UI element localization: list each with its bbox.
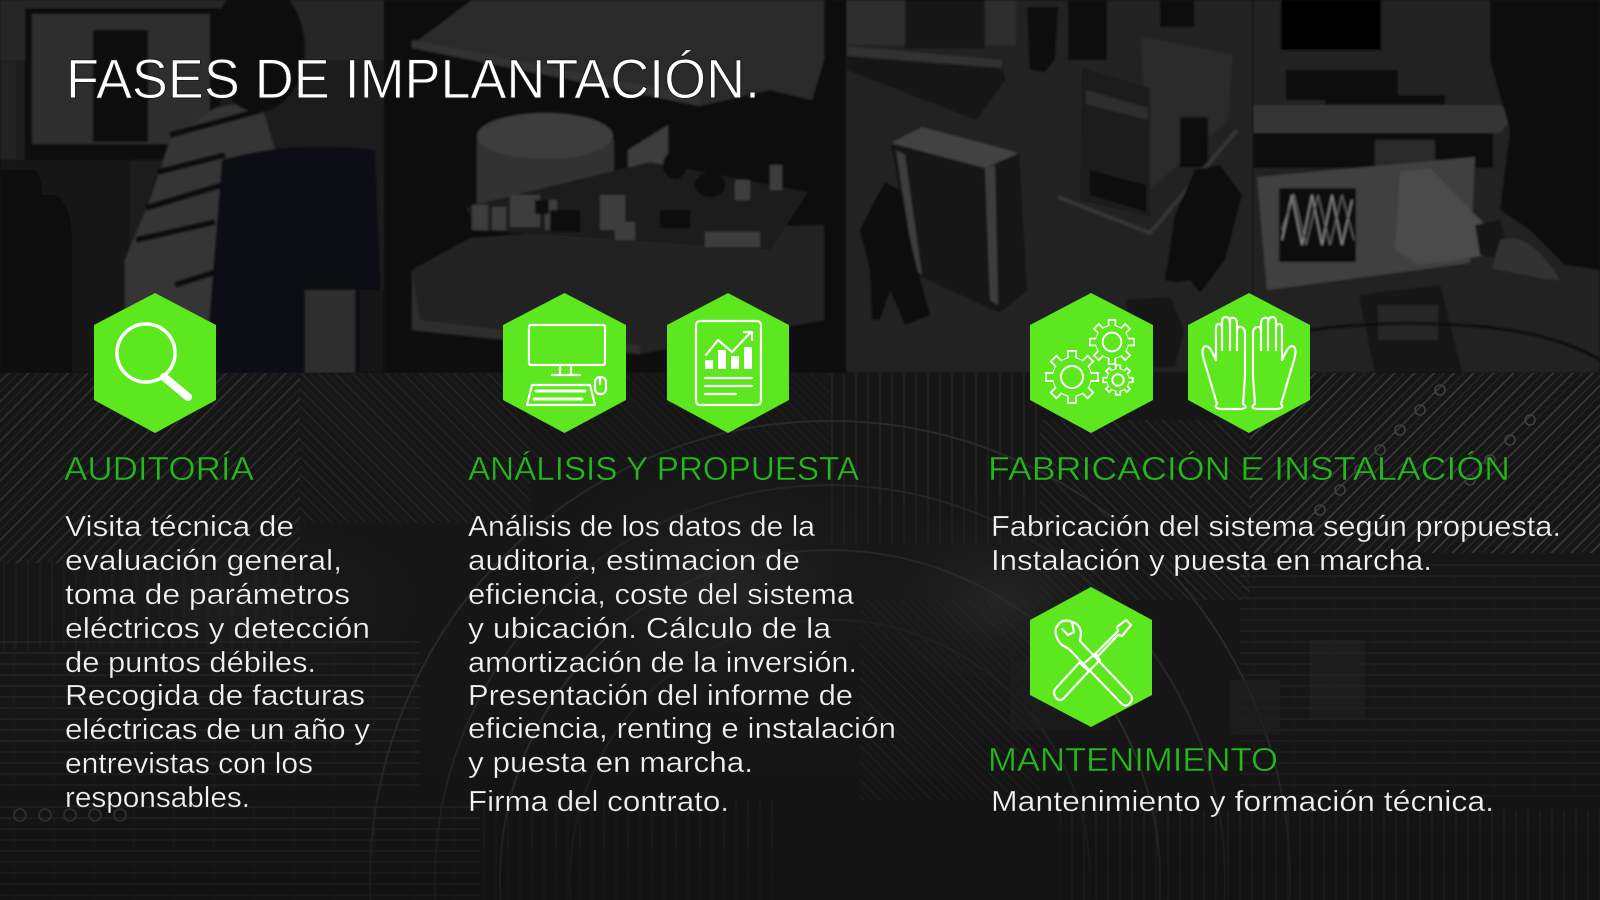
text block: análisis y propuesta: y puesta en marcha. (468, 747, 753, 779)
text block: análisis y propuesta: eficiencia, renting e instalación (468, 713, 896, 745)
heading: fabricación e instalación: FABRICACIÓN E INSTALACIÓN (988, 450, 1510, 488)
text block: auditoría: evaluación general, (65, 545, 342, 577)
text block: auditoría: eléctricas de un año y (65, 714, 371, 746)
text block: auditoría: eléctricos y detección (65, 613, 370, 645)
text block: análisis y propuesta: Análisis de los datos de la (468, 511, 816, 543)
icon: report chart hexagon (667, 293, 789, 433)
icon: gears hexagon (1030, 293, 1153, 433)
text block: auditoría: Recogida de facturas (65, 680, 365, 712)
icon: computer hexagon (503, 293, 626, 433)
text block: auditoría: toma de parámetros (65, 579, 350, 611)
text block: auditoría: Visita técnica de (65, 511, 294, 543)
text block: mantenimiento: Mantenimiento y formación técnica. (991, 786, 1494, 818)
photo: factory floor (846, 0, 1253, 373)
text block: análisis y propuesta: Firma del contrato. (468, 786, 729, 818)
photo: oscilloscope measurement (1253, 0, 1600, 373)
text block: auditoría: responsables. (65, 782, 250, 814)
title: FASES DE IMPLANTACIÓN. (66, 47, 760, 110)
heading: análisis y propuesta: ANÁLISIS Y PROPUESTA (468, 451, 860, 488)
background: lower circuit board (0, 373, 1600, 900)
text block: análisis y propuesta: auditoria, estimacion de (468, 545, 800, 577)
icon: gloves hexagon (1188, 293, 1310, 433)
text block: auditoría: entrevistas con los (65, 748, 313, 780)
text block: análisis y propuesta: amortización de la inversión. (468, 647, 857, 679)
text block: análisis y propuesta: Presentación del informe de (468, 680, 853, 712)
icon: wrench and screwdriver hexagon (1030, 587, 1152, 727)
text block: fabricación e instalación: Fabricación del sistema según propuesta. (991, 511, 1561, 543)
text block: fabricación e instalación (991, 511, 1561, 577)
text block: auditoría (65, 511, 371, 814)
photo: engineer at computer (0, 0, 384, 373)
heading: mantenimiento: MANTENIMIENTO (988, 742, 1278, 779)
text block: análisis y propuesta: y ubicación. Cálculo de la (468, 613, 832, 645)
text block: auditoría: de puntos débiles. (65, 647, 316, 679)
photo: electronic device exploded view (411, 0, 824, 354)
text block: análisis y propuesta (468, 511, 896, 818)
icon: magnifying glass hexagon (94, 293, 216, 433)
text block: fabricación e instalación: Instalación y puesta en marcha. (991, 545, 1432, 577)
text block: análisis y propuesta: eficiencia, coste del sistema (468, 579, 855, 611)
heading: auditoría: AUDITORÍA (64, 451, 255, 488)
